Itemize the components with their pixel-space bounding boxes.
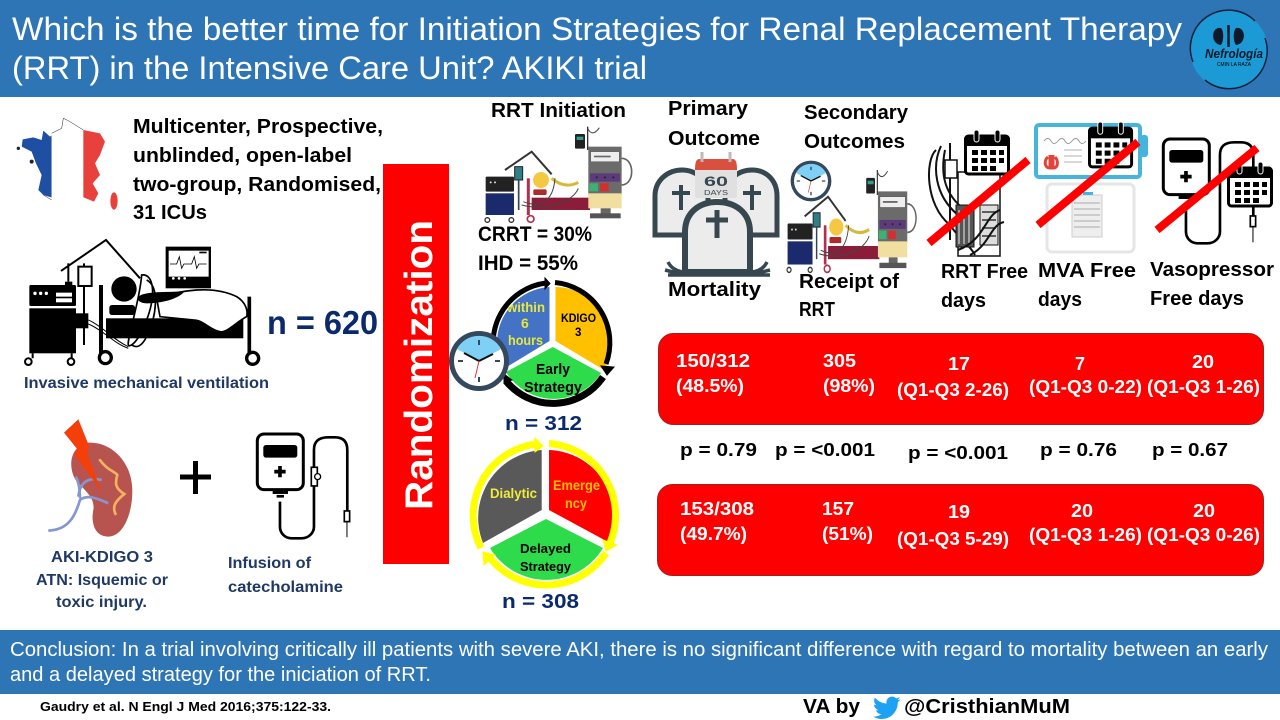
sector: emergency: ncy — [565, 496, 587, 511]
citation: Gaudry et al. N Engl J Med 2016;375:122-33. — [40, 700, 331, 714]
sector: dialytic: Dialytic — [490, 486, 537, 501]
RRT free days early — [897, 354, 1009, 400]
label: MVA free days: days — [1038, 289, 1082, 311]
study design text: two-group, Randomised, — [133, 174, 381, 196]
n = 308: n = 308 — [502, 591, 579, 613]
receipt of RRT delayed: (51%) — [822, 524, 873, 544]
receipt of RRT delayed — [822, 499, 873, 544]
icon: ventilator free days, crossed out — [1036, 122, 1148, 252]
vasopressor free days early: 20 — [1192, 352, 1214, 372]
icon: tombstones with 60-day calendar: 60 — [704, 173, 728, 189]
sector: within 6 hours: hours — [508, 332, 543, 348]
catecholamine caption: catecholamine — [228, 579, 343, 596]
label: MVA free days: MVA Free — [1038, 260, 1136, 282]
study design text: 31 ICUs — [133, 202, 207, 224]
mortality delayed: (49.7%) — [680, 524, 747, 544]
heading: primary outcome: Primary — [668, 98, 749, 120]
catecholamine caption: Infusion of — [228, 555, 312, 572]
p values: p = 0.76 — [1040, 439, 1117, 460]
MVA free days delayed: 20 — [1071, 501, 1093, 521]
receipt of RRT early — [823, 351, 875, 396]
RRT free days delayed: 19 — [948, 502, 970, 522]
title: (RRT) in the Intensive Care Unit? AKIKI trial — [12, 50, 647, 86]
sector: KDIGO 3 — [556, 287, 611, 370]
heading: RRT initiation: RRT Initiation — [491, 100, 626, 122]
sector: delayed strategy — [490, 519, 603, 580]
ring arrows — [473, 438, 617, 585]
logo: Nefrología — [1190, 10, 1268, 89]
mortality early: 150/312 — [676, 351, 750, 371]
modality percentages: CRRT = 30% — [478, 223, 592, 246]
mortality delayed: 153/308 — [680, 499, 754, 519]
caption: invasive mechanical ventilation: Invasive mechanical ventilation — [24, 375, 269, 392]
MVA free days delayed — [1029, 501, 1142, 545]
panel: randomization bar — [383, 164, 449, 564]
label: mortality: Mortality — [668, 279, 762, 301]
p values: p = <0.001 — [775, 439, 875, 460]
heading: primary outcome: Outcome — [668, 128, 760, 150]
icon: vasopressor free days, crossed out — [1157, 139, 1272, 243]
catecholamine caption — [228, 555, 343, 596]
label: vasopressor free days — [1150, 259, 1274, 310]
vasopressor free days early — [1147, 352, 1260, 397]
sector: emergency: Emerge — [553, 478, 600, 493]
panel: delayed strategy results — [658, 484, 1264, 576]
label: receipt of RRT — [799, 271, 899, 321]
vasopressor free days delayed — [1147, 501, 1260, 545]
sector: dialytic — [478, 450, 542, 543]
study design text — [133, 116, 383, 224]
label: receipt of RRT: Receipt of — [799, 271, 899, 293]
p values: p = 0.67 — [1152, 439, 1228, 460]
study design text: Multicenter, Prospective, — [133, 116, 383, 138]
mortality early — [676, 351, 750, 396]
RRT free days early: (Q1-Q3 2-26) — [897, 380, 1009, 400]
mortality early: (48.5%) — [676, 376, 744, 396]
sector: early strategy — [506, 347, 601, 399]
kidney injury caption: toxic injury. — [56, 594, 147, 611]
sector: within 6 hours: within — [506, 299, 545, 315]
icon: RRT free days, crossed out — [929, 130, 1028, 256]
icon: twitter bird — [873, 697, 901, 719]
label: MVA free days — [1038, 260, 1136, 311]
credit: twitter handle: @CristhianMuM — [904, 696, 1070, 718]
MVA free days early: 7 — [1075, 354, 1085, 374]
sector: KDIGO 3: 3 — [575, 327, 581, 339]
sector: within 6 hours — [497, 287, 550, 369]
receipt of RRT early: (98%) — [823, 376, 875, 396]
vasopressor free days delayed: 20 — [1193, 501, 1215, 521]
icon: injured kidney — [48, 419, 132, 537]
p values: p = <0.001 — [908, 442, 1008, 463]
heading: secondary outcomes: Outcomes — [804, 131, 905, 153]
vasopressor free days delayed: (Q1-Q3 0-26) — [1147, 525, 1260, 545]
study design text: unblinded, open-label — [133, 145, 352, 167]
sector: early strategy: Early — [536, 362, 570, 378]
sector: KDIGO 3: KDIGO — [561, 313, 596, 325]
modality percentages: IHD = 55% — [478, 252, 578, 275]
receipt of RRT delayed: 157 — [822, 499, 854, 519]
conclusion band — [0, 630, 1280, 694]
heading: secondary outcomes: Secondary — [804, 102, 909, 124]
icon: France map flag — [13, 113, 118, 210]
icon: tombstones with 60-day calendar: DAYS — [704, 190, 728, 197]
heading: primary outcome — [668, 98, 760, 150]
sector: emergency — [549, 450, 615, 543]
panel: randomization bar: Randomization — [398, 220, 441, 510]
sector: within 6 hours: 6 — [521, 315, 529, 331]
sector: early strategy: Strategy — [524, 380, 582, 396]
sector: delayed strategy: Strategy — [520, 559, 572, 574]
chart: delayed strategy cycle — [473, 438, 617, 585]
credit: VA by: VA by — [803, 696, 861, 718]
logo: Nefrología: CMIN LA RAZA — [1217, 62, 1252, 68]
label: vasopressor free days: Vasopressor — [1150, 259, 1274, 281]
n = 620: n = 620 — [267, 304, 378, 341]
MVA free days early — [1029, 354, 1142, 397]
icon: clock and RRT machine — [787, 161, 916, 272]
mortality delayed — [680, 499, 754, 544]
n = 312: n = 312 — [505, 413, 582, 435]
label: receipt of RRT: RRT — [799, 299, 835, 321]
panel: early strategy results — [658, 334, 1264, 424]
label: RRT free days: RRT Free — [941, 261, 1028, 283]
sector: delayed strategy: Delayed — [520, 541, 571, 556]
icon: ventilated patient in bed — [25, 240, 259, 365]
title — [12, 11, 1182, 86]
ring arrows — [493, 278, 614, 403]
MVA free days early: (Q1-Q3 0-22) — [1029, 377, 1142, 397]
receipt of RRT early: 305 — [823, 351, 856, 371]
label: RRT free days: days — [941, 290, 986, 312]
chart: early strategy cycle — [493, 278, 614, 403]
icon: infusion bag — [257, 434, 350, 538]
modality percentages — [478, 223, 592, 275]
p values — [680, 439, 1228, 463]
RRT free days early: 17 — [948, 354, 970, 374]
RRT free days delayed — [897, 502, 1009, 549]
label: RRT free days — [941, 261, 1028, 312]
conclusion band: and a delayed strategy for the iniciation of RRT. — [10, 663, 431, 686]
kidney injury caption: ATN: Isquemic or — [36, 572, 168, 589]
icon: RRT machine and patient — [485, 127, 632, 222]
MVA free days delayed: (Q1-Q3 1-26) — [1029, 525, 1142, 545]
logo: Nefrología: Nefrología — [1205, 47, 1263, 61]
vasopressor free days early: (Q1-Q3 1-26) — [1147, 377, 1260, 397]
title: Which is the better time for Initiation Strategies for Renal Replacement Therapy — [12, 11, 1182, 47]
icon: clock — [449, 331, 509, 391]
kidney injury caption: AKI-KDIGO 3 — [51, 549, 153, 566]
label: vasopressor free days: Free days — [1150, 288, 1244, 310]
RRT free days delayed: (Q1-Q3 5-29) — [897, 529, 1009, 549]
header band — [0, 0, 1280, 97]
heading: secondary outcomes — [804, 102, 909, 153]
conclusion band: Conclusion: In a trial involving critically ill patients with severe AKI, there is no significant difference with regard to mortality between an early — [10, 638, 1269, 661]
plus sign — [180, 461, 211, 494]
p values: p = 0.79 — [680, 439, 757, 460]
kidney injury caption — [36, 549, 168, 611]
icon: tombstones with 60-day calendar — [655, 152, 777, 275]
